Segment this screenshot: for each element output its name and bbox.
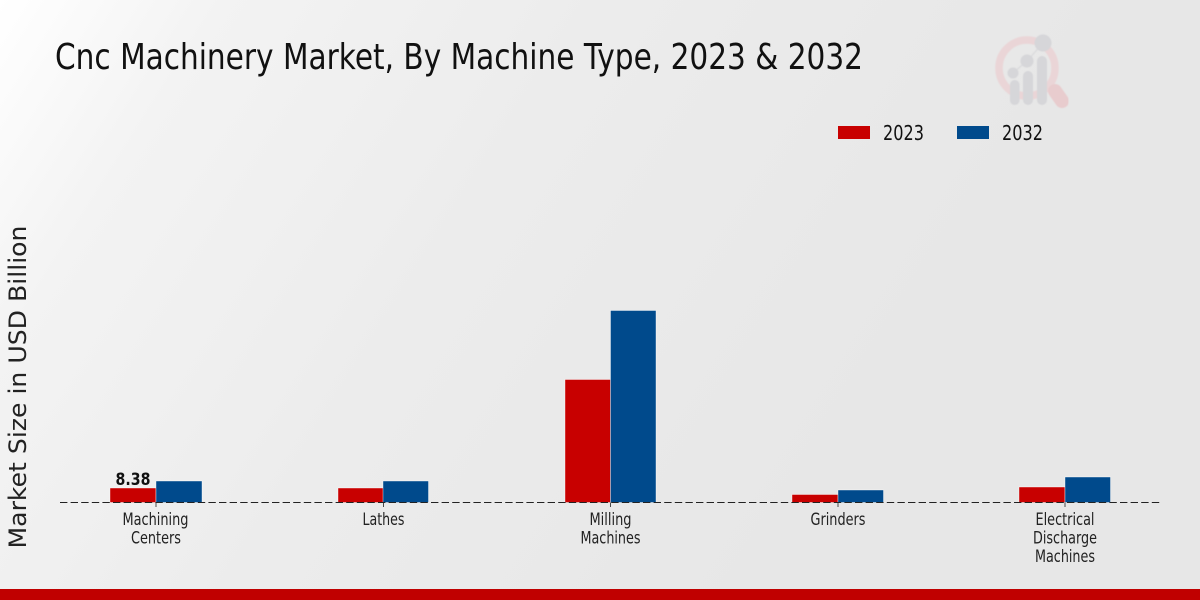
bar chart bbox=[110, 310, 1110, 502]
legend bbox=[838, 121, 1043, 145]
group: Machining Centers bbox=[110, 481, 202, 502]
label: Milling Machines: Milling bbox=[590, 510, 632, 529]
label: Milling Machines bbox=[580, 510, 640, 548]
label: Machining Centers: Machining bbox=[122, 510, 188, 529]
label: Grinders: Grinders bbox=[810, 510, 866, 529]
group: Lathes bbox=[338, 481, 428, 502]
x axis baseline bbox=[60, 502, 1160, 507]
group: Milling Machines bbox=[565, 310, 656, 502]
legend item: 2023 bbox=[838, 121, 924, 145]
label: Machining Centers: Centers bbox=[131, 528, 181, 548]
label: Electrical Discharge Machines bbox=[1033, 510, 1097, 566]
label: Lathes: Lathes bbox=[362, 510, 404, 529]
group: Electrical Discharge Machines bbox=[1019, 477, 1110, 502]
group: Grinders bbox=[792, 490, 884, 502]
x axis labels bbox=[122, 510, 1097, 566]
footer bar bbox=[0, 589, 1200, 600]
legend item: 2032 bbox=[957, 121, 1043, 145]
legend item: 2023: 2023 bbox=[883, 121, 924, 145]
icon: watermark logo bbox=[999, 34, 1062, 105]
label: Milling Machines: Machines bbox=[580, 528, 640, 548]
title: Cnc Machinery Market, By Machine Type, 2023 & 2032 bbox=[55, 37, 863, 78]
y axis label: Market Size in USD Billion bbox=[4, 226, 32, 548]
label: Electrical Discharge Machines: Electrical bbox=[1036, 510, 1094, 529]
data label: 8.38: 8.38 bbox=[116, 470, 150, 489]
label: Electrical Discharge Machines: Machines bbox=[1035, 547, 1095, 566]
legend item: 2032: 2032 bbox=[1002, 121, 1043, 145]
label: Electrical Discharge Machines: Discharge bbox=[1033, 528, 1097, 548]
label: Machining Centers bbox=[122, 510, 188, 548]
